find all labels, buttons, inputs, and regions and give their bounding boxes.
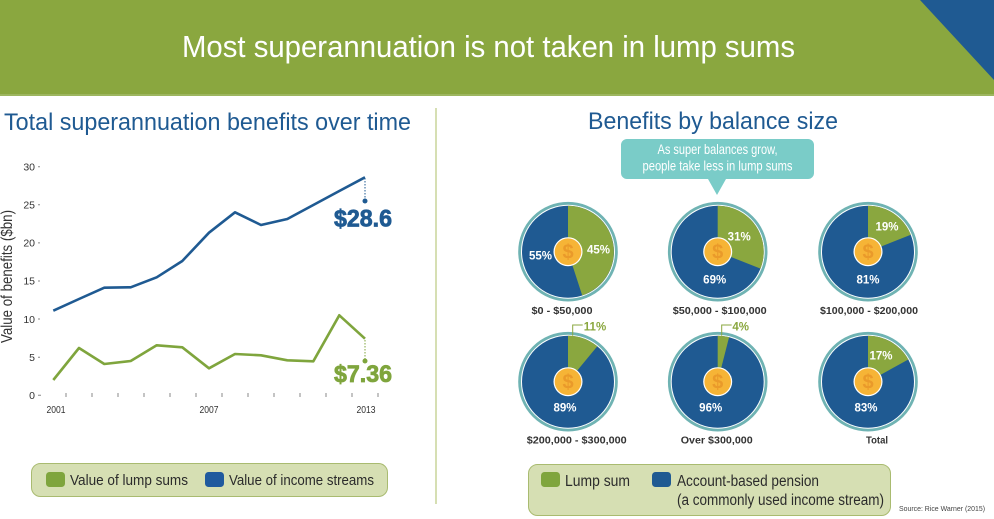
pie: Total — [820, 333, 916, 447]
pie: Over $300,000: 96% — [699, 403, 722, 415]
callout: lump sums value — [334, 340, 392, 388]
x axis labels: 2013 — [356, 405, 376, 416]
pie: $0 - $50,000: 45% — [587, 245, 610, 257]
y axis labels: 0 — [29, 390, 35, 402]
pie: $100,000 - $200,000: 81% — [856, 275, 880, 287]
left legend: Value of income streams — [229, 472, 374, 489]
pie: $100,000 - $200,000 — [820, 203, 918, 317]
x axis labels: 2007 — [200, 405, 219, 416]
y axis labels: 5 — [29, 352, 35, 364]
pie: Over $300,000 — [669, 322, 766, 447]
y axis labels — [23, 162, 35, 402]
pie: $50,000 - $100,000: $50,000 - $100,000 — [673, 305, 767, 317]
pie: $100,000 - $200,000: $100,000 - $200,000 — [820, 305, 918, 317]
y axis labels: 15 — [23, 276, 35, 288]
pie: Total: $ — [862, 372, 874, 394]
pie: $100,000 - $200,000: 19% — [875, 222, 899, 234]
pie: Over $300,000: 4% — [732, 322, 749, 334]
callout: lump sums value: $7.36 — [334, 361, 392, 388]
y axis labels: 30 — [23, 162, 35, 174]
y axis labels: 25 — [23, 200, 35, 212]
pie: Over $300,000: $ — [712, 372, 723, 394]
callout bubble — [621, 139, 814, 195]
pie: Over $300,000: Over $300,000 — [681, 435, 753, 447]
line chart — [0, 162, 392, 416]
pie: Total: Total — [866, 435, 888, 447]
pie: $0 - $50,000: 55% — [529, 251, 552, 263]
lump sums line — [53, 315, 365, 380]
title: Most superannuation is not taken in lump sums — [182, 29, 795, 64]
right legend: Account-based pension — [677, 473, 819, 490]
pie: $200,000 - $300,000: $200,000 - $300,000 — [527, 435, 627, 447]
x axis labels — [46, 405, 376, 416]
y axis labels: 10 — [23, 314, 35, 326]
header banner — [0, 0, 994, 96]
right heading: Benefits by balance size — [588, 108, 838, 135]
pie: $200,000 - $300,000: 89% — [553, 403, 577, 415]
callout: income streams value: $28.6 — [334, 206, 392, 232]
pie: $50,000 - $100,000: $ — [712, 242, 723, 264]
y axis labels: 20 — [23, 238, 35, 250]
left legend: Value of lump sums — [70, 472, 188, 489]
pie: $50,000 - $100,000: 31% — [728, 232, 751, 244]
right legend — [528, 464, 890, 516]
income streams line — [53, 177, 365, 311]
pie: $0 - $50,000: $ — [562, 242, 574, 264]
source note: Source: Rice Warner (2015) — [899, 504, 985, 513]
pie: $200,000 - $300,000: $ — [562, 372, 574, 394]
pie: $200,000 - $300,000: 11% — [584, 322, 606, 334]
divider — [435, 108, 437, 504]
right legend: Lump sum — [565, 473, 630, 490]
pie: Total: 17% — [869, 351, 893, 363]
pie: $0 - $50,000: $0 - $50,000 — [532, 305, 593, 317]
left legend — [32, 464, 388, 496]
x axis labels: 2001 — [46, 405, 66, 416]
right legend: (a commonly used income stream) — [677, 492, 884, 509]
axis ticks — [38, 167, 378, 397]
left heading: Total superannuation benefits over time — [4, 109, 411, 136]
callout bubble: As super balances grow, — [658, 141, 778, 157]
pie: $50,000 - $100,000: 69% — [703, 275, 726, 287]
callout bubble: people take less in lump sums — [642, 158, 792, 174]
pie: $100,000 - $200,000: $ — [862, 242, 874, 264]
pie: $50,000 - $100,000 — [669, 203, 767, 317]
pie: $200,000 - $300,000 — [520, 322, 627, 447]
icon: corner triangle — [920, 0, 994, 80]
callout: income streams value — [334, 178, 392, 232]
pie: $0 - $50,000 — [520, 203, 616, 317]
pie: Total: 83% — [854, 403, 878, 415]
